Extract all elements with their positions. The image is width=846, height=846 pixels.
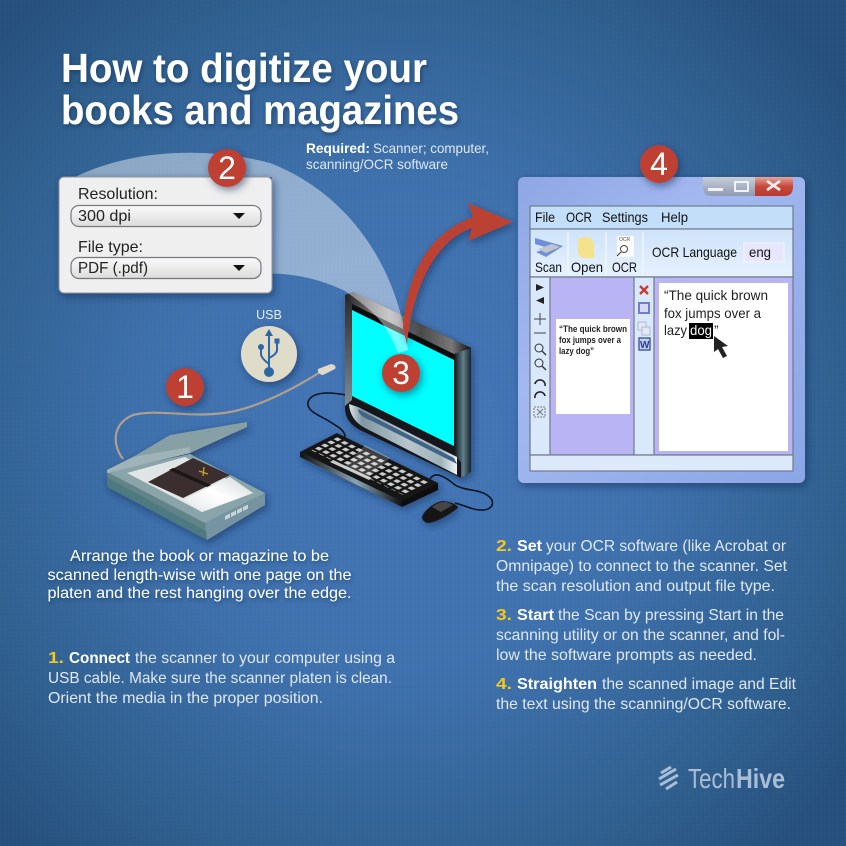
toolbar: OCR — [612, 259, 637, 275]
red arrow — [403, 203, 513, 345]
step 4 text: the scanned image and Edit — [602, 676, 797, 693]
step 2 text: Set — [517, 538, 543, 555]
step 3 text: low the software prompts as needed. — [496, 647, 757, 664]
panel: scan settings: PDF (.pdf) — [78, 260, 148, 277]
TechHive logo: Hive — [736, 763, 785, 794]
required note — [306, 140, 489, 172]
panel: scan settings: 300 dpi — [78, 208, 131, 225]
status bar — [530, 455, 793, 471]
step 3 text: 3. — [496, 607, 512, 624]
usb label and icon — [241, 308, 297, 382]
step 2 text: the scan resolution and output file type. — [496, 578, 775, 595]
scanner — [107, 422, 265, 540]
step 3 text: Start — [517, 607, 555, 624]
step 4 text: the text using the scanning/OCR software. — [496, 696, 791, 713]
menu bar: File — [535, 209, 555, 225]
toolbar: OCR Language — [652, 244, 737, 260]
edited text page: lazy — [664, 322, 687, 338]
left tool column — [530, 277, 550, 455]
step 2 text: your OCR software (like Acrobat or — [546, 538, 787, 555]
step 1 text: Orient the media in the proper position. — [48, 690, 323, 707]
step 4 text — [496, 676, 797, 713]
step 3 text — [496, 607, 785, 664]
screen — [352, 310, 454, 446]
scanned page preview: lazy dog” — [559, 346, 594, 357]
panel: scan settings: File type: — [78, 239, 143, 256]
monitor cable — [308, 393, 346, 437]
step 1 text: Connect — [69, 650, 131, 667]
intro text: scanned length-wise with one page on the — [48, 567, 352, 584]
required note: scanning/OCR software — [306, 156, 448, 172]
scanned page preview: fox jumps over a — [559, 335, 622, 346]
toolbar — [530, 229, 793, 277]
monitor — [345, 292, 471, 478]
step 2 text — [496, 538, 788, 595]
step 2 text: Omnipage) to connect to the scanner. Set — [496, 558, 788, 575]
scanned page preview — [556, 319, 630, 414]
menu bar — [530, 206, 793, 229]
step 3 text: scanning utility or on the scanner, and fol- — [496, 627, 785, 644]
menu bar: Settings — [602, 209, 648, 225]
mouse cable — [430, 475, 492, 510]
step 1 text: USB cable. Make sure the scanner platen is clean. — [48, 670, 392, 687]
TechHive logo: Tech — [688, 763, 735, 794]
panel: scan settings: Resolution: — [78, 186, 158, 203]
menu bar: OCR — [566, 209, 592, 225]
step 3 badge — [382, 354, 420, 392]
menu bar: Help — [661, 209, 688, 225]
step 4 badge: 4 — [650, 146, 668, 182]
edited text page: “The quick brown — [664, 287, 768, 303]
step 1 text: 1. — [48, 650, 64, 667]
toolbar: eng — [749, 244, 771, 260]
step 4 text: 4. — [496, 676, 512, 693]
intro text: Arrange the book or magazine to be — [70, 548, 329, 565]
edited text page: fox jumps over a — [664, 305, 761, 321]
toolbar: Open — [571, 259, 603, 275]
title: books and magazines — [61, 87, 459, 133]
step 3 text: the Scan by pressing Start in the — [558, 607, 784, 624]
toolbar: OCR — [619, 237, 630, 243]
scanned page preview: “The quick brown — [559, 324, 627, 335]
required note: Required: — [306, 140, 370, 156]
edited text page: dog — [690, 322, 712, 338]
step 1 text — [48, 650, 395, 707]
title — [61, 45, 459, 133]
main area — [530, 277, 793, 455]
step 4 badge — [640, 145, 678, 183]
intro text — [48, 548, 352, 602]
step 1 badge — [166, 368, 204, 406]
step 3 badge: 3 — [392, 355, 410, 391]
mouse — [422, 501, 458, 523]
required note: Scanner; computer, — [373, 140, 489, 156]
title: How to digitize your — [61, 45, 427, 91]
panel: OCR software window — [518, 177, 805, 483]
window buttons — [703, 177, 793, 196]
intro text: platen and the rest hanging over the edge. — [48, 585, 352, 602]
TechHive logo — [659, 763, 785, 794]
edited text page: ” — [714, 322, 719, 338]
right tool column: W — [640, 340, 650, 351]
usb cable — [116, 364, 335, 459]
step 2 text: 2. — [496, 538, 512, 555]
usb label and icon: USB — [256, 308, 282, 322]
right tool column — [634, 277, 654, 455]
panel: scan settings — [59, 177, 272, 293]
step 2 badge: 2 — [218, 150, 236, 186]
toolbar: Scan — [535, 259, 562, 275]
step 2 badge — [208, 149, 246, 187]
step 1 text: the scanner to your computer using a — [135, 650, 395, 667]
keyboard — [300, 433, 438, 507]
light beam — [75, 153, 408, 353]
edited text page — [659, 283, 788, 451]
step 4 text: Straighten — [517, 676, 597, 693]
step 1 badge: 1 — [176, 369, 194, 405]
